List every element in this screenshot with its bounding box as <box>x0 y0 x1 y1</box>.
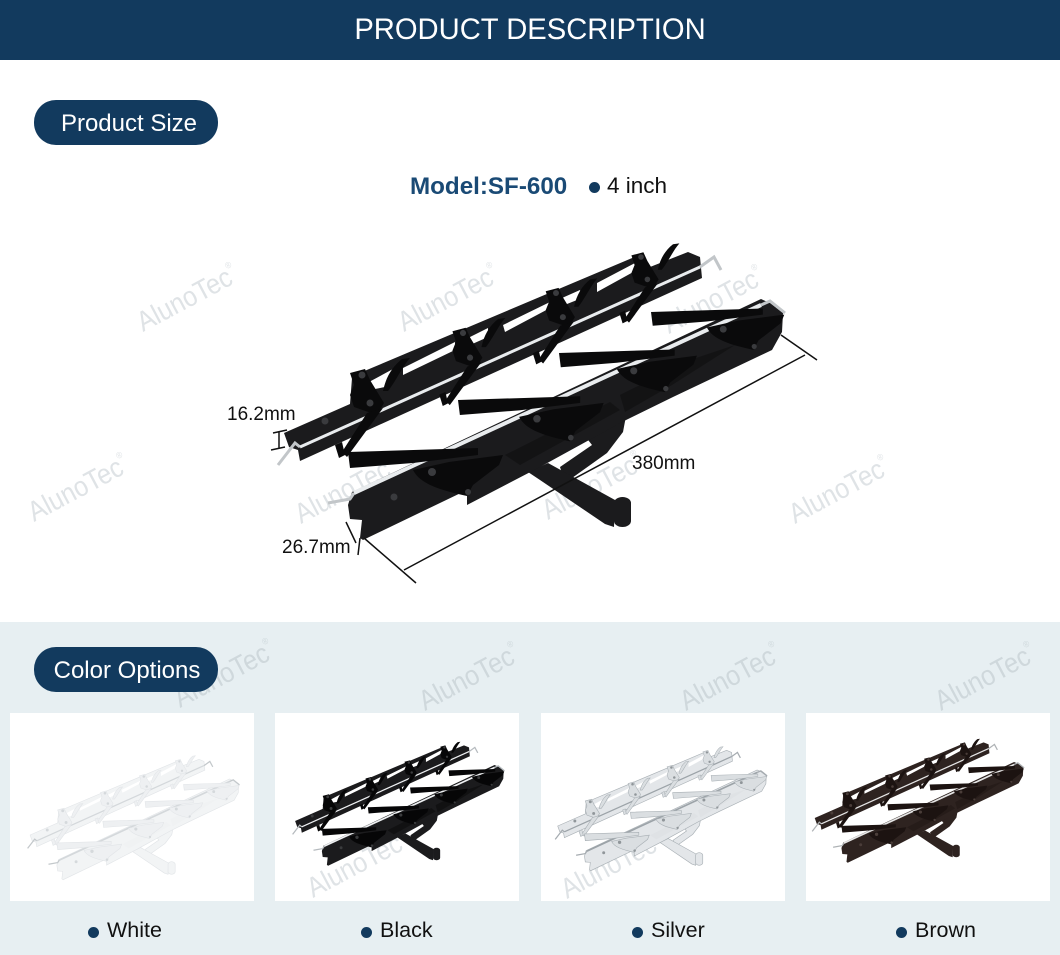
product drawing with dimensions <box>227 243 818 584</box>
pill heading: product size: Product Size <box>61 110 197 137</box>
pill heading: color options: Color Options <box>54 657 200 684</box>
header banner <box>0 0 1060 60</box>
model line: 4 inch <box>607 173 667 198</box>
caption: brown: Brown <box>915 918 976 942</box>
caption: white: White <box>107 918 162 942</box>
watermarks: ® <box>1021 638 1032 650</box>
watermarks: AlunoTec <box>929 640 1035 717</box>
thumbnail: silver <box>541 713 785 901</box>
thumbnail: black <box>275 713 519 901</box>
watermarks: AlunoTec <box>413 640 519 717</box>
pill heading: product size <box>34 100 218 145</box>
watermarks: ® <box>260 635 271 647</box>
dimension label: 16.2mm: 16.2mm <box>227 404 296 425</box>
caption: black: Black <box>380 918 433 942</box>
watermarks: ® <box>381 451 392 463</box>
model line: Model:SF-600 <box>410 173 567 200</box>
watermarks: ® <box>114 449 125 461</box>
watermarks: AlunoTec <box>392 261 498 338</box>
product: louver hardware <box>278 243 785 540</box>
model line <box>410 173 667 200</box>
watermarks: AlunoTec <box>289 453 395 530</box>
watermarks: ® <box>628 447 639 459</box>
watermarks: AlunoTec <box>168 637 274 714</box>
header banner: PRODUCT DESCRIPTION <box>354 14 706 46</box>
dimension label: 380mm: 380mm <box>632 453 695 474</box>
dimension lines <box>271 335 817 583</box>
thumbnail: brown <box>806 713 1050 901</box>
caption: silver: Silver <box>651 918 705 942</box>
thumbnail: white <box>10 713 254 901</box>
watermarks: ® <box>749 261 760 273</box>
watermarks: AlunoTec <box>22 451 128 528</box>
watermarks: AlunoTec <box>674 640 780 717</box>
watermarks: AlunoTec <box>131 261 237 338</box>
watermarks: AlunoTec <box>536 449 642 526</box>
watermarks: ® <box>223 259 234 271</box>
dimension label: 26.7mm: 26.7mm <box>282 537 351 558</box>
watermarks: ® <box>875 451 886 463</box>
watermarks: ® <box>484 259 495 271</box>
watermarks: AlunoTec <box>783 453 889 530</box>
panel: color options background <box>0 622 1060 955</box>
watermarks: ® <box>505 638 516 650</box>
pill heading: color options <box>34 647 218 692</box>
watermarks: AlunoTec <box>657 263 763 340</box>
watermarks: ® <box>766 638 777 650</box>
